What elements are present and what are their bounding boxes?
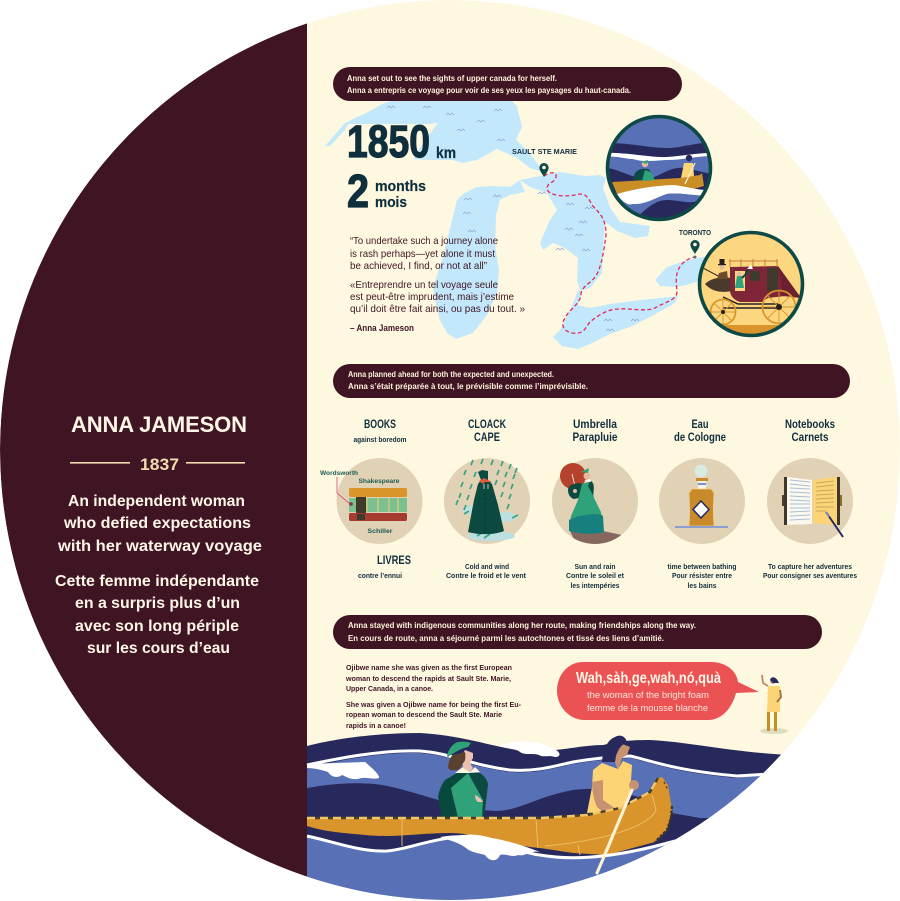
- item: notebooks: Pour consigner ses aventures: [763, 571, 857, 580]
- French description: en a surpris plus d’un: [75, 595, 240, 612]
- medallion: stagecoach: [695, 231, 810, 339]
- English description: [57, 493, 262, 555]
- canoe: [307, 777, 672, 855]
- speech bubble: Wah,sàh,ge,wah,nó,quà: [576, 670, 721, 687]
- stat: 2 months: months: [375, 178, 426, 195]
- quote: be achieved, I find, or not at all”: [350, 260, 487, 272]
- label: Sault Ste Marie with pin: SAULT STE MARIE: [512, 147, 577, 156]
- text block: Ojibwe name: Ojibwe name she was given as the first European: [346, 663, 512, 672]
- band 3: Anna stayed with indigenous communities along her route, making friendships along the way.: [348, 621, 696, 630]
- quote: “To undertake such a journey alone: [350, 235, 498, 247]
- stat: 2 months: mois: [375, 194, 407, 211]
- item: umbrella: Parapluie: [572, 432, 618, 444]
- quote: – Anna Jameson: [350, 323, 414, 334]
- quote: qu’il doit être fait ainsi, ou pas du tout. »: [350, 303, 525, 315]
- item: books: against boredom: [354, 435, 406, 444]
- text block: Ojibwe name: Upper Canada, in a canoe.: [346, 684, 433, 693]
- item: umbrella: [552, 419, 638, 590]
- back foam: [500, 742, 560, 757]
- icon: open notebook: [767, 458, 853, 544]
- band 2: Anna planned ahead for both the expected and unexpected.: [348, 370, 554, 379]
- item: cloak: Contre le froid et le vent: [446, 571, 527, 580]
- item: cloak: Cold and wind: [465, 562, 509, 571]
- stat: 1850 km: 1850: [347, 116, 430, 167]
- quote: [350, 235, 525, 334]
- item: cloak: CLOACK: [468, 419, 507, 431]
- medallion: canoe in rapids: [606, 114, 712, 222]
- band 1: Anna a entrepris ce voyage pour voir de ses yeux les paysages du haut-canada.: [347, 86, 631, 95]
- speech bubble: the woman of the bright foam: [587, 690, 709, 700]
- lower white wave with foam: [307, 836, 675, 858]
- English description: who defied expectations: [63, 515, 251, 532]
- item: books: LIVRES: [377, 555, 411, 567]
- item: eau de cologne: Eau: [692, 419, 708, 431]
- stat: 2 months: 2: [347, 165, 369, 217]
- band 1: Anna set out to see the sights of upper canada for herself.: [347, 74, 557, 83]
- item: notebooks: Notebooks: [785, 419, 835, 431]
- item: umbrella: les intempéries: [570, 581, 620, 590]
- map: Great Lakes: [325, 99, 708, 349]
- speech bubble: [557, 662, 759, 720]
- background cream panel: [307, 0, 900, 754]
- icon: books: Shakespeare: [358, 478, 400, 485]
- item: eau de cologne: time between bathing: [668, 562, 736, 571]
- band 3: [333, 615, 822, 649]
- item: eau de cologne: [659, 419, 745, 590]
- item: cloak: CAPE: [474, 432, 500, 444]
- quote: est peut-être imprudent, mais j’estime: [350, 291, 514, 303]
- item: umbrella: Umbrella: [573, 419, 618, 431]
- navy back wave: [307, 733, 790, 901]
- item: umbrella: Sun and rain: [574, 562, 616, 571]
- item: cloak: [444, 419, 530, 580]
- band 1: [333, 67, 682, 101]
- band 3: En cours de route, anna a séjourné parmi les autochtones et tissé des liens d’amitié.: [348, 634, 664, 643]
- speech bubble: femme de la mousse blanche: [587, 703, 708, 713]
- label: Toronto with pin: [679, 228, 711, 258]
- lake wave marks: [387, 106, 639, 331]
- band 2: [333, 364, 850, 398]
- icon: books: Wordsworth: [320, 470, 358, 477]
- icon: books: Schiller: [368, 528, 393, 535]
- panel: title sidebar: [0, 0, 307, 901]
- label: Toronto with pin: TORONTO: [679, 228, 711, 237]
- text block: Ojibwe name: rapids in a canoe!: [346, 721, 406, 730]
- stat: 1850 km: [348, 124, 456, 158]
- year 1837 with rules: 1837: [140, 455, 179, 474]
- English description: with her waterway voyage: [57, 538, 262, 555]
- band 2: Anna s’était préparée à tout, le prévisible comme l’imprévisible.: [348, 382, 588, 391]
- text block: Ojibwe name: woman to descend the rapids at Sault Ste. Marie,: [345, 674, 511, 683]
- icon: cloak in rain: [444, 458, 530, 544]
- quote: «Entreprendre un tel voyage seule: [350, 279, 498, 291]
- scene: canoe on waves: [307, 733, 790, 901]
- item: books: [320, 419, 422, 580]
- stat: 1850 km: km: [436, 145, 456, 162]
- item: notebooks: Carnets: [792, 432, 828, 444]
- item: eau de cologne: Pour résister entre: [672, 571, 732, 580]
- heading: Anna Jameson: ANNA JAMESON: [71, 412, 247, 437]
- French description: sur les cours d’eau: [87, 640, 230, 657]
- quote: is rash perhaps—yet alone it must: [350, 248, 495, 260]
- figure: paddler: [587, 736, 639, 822]
- stat: 2 months: [348, 174, 426, 208]
- lower water: [307, 836, 675, 901]
- white wave line: [307, 751, 770, 776]
- dark hills: [307, 783, 730, 860]
- icon: woman with parasol: [552, 458, 638, 550]
- figure: Anna Jameson: [438, 742, 488, 824]
- French description: avec son long périple: [75, 618, 239, 635]
- front foam: [307, 762, 379, 779]
- French description: [55, 573, 259, 657]
- item: notebooks: [763, 419, 857, 580]
- item: notebooks: To capture her adventures: [768, 562, 852, 571]
- label: Sault Ste Marie with pin: [512, 147, 577, 177]
- item: books: BOOKS: [364, 419, 396, 431]
- item: umbrella: Contre le soleil et: [566, 571, 625, 580]
- text block: Ojibwe name: ropean woman to descend the Sault Ste. Marie: [346, 710, 502, 719]
- paddle blade over water: [597, 838, 612, 873]
- item: books: contre l’ennui: [358, 571, 402, 580]
- text block: Ojibwe name: [345, 663, 521, 730]
- icon: cologne bottle: [659, 458, 745, 544]
- item: eau de cologne: les bains: [688, 581, 716, 590]
- English description: An independent woman: [68, 493, 245, 510]
- icon: books: [320, 458, 422, 544]
- paddle: [597, 790, 632, 873]
- French description: Cette femme indépendante: [55, 573, 259, 590]
- item: eau de cologne: de Cologne: [674, 432, 726, 444]
- blue water: [307, 753, 780, 901]
- text block: Ojibwe name: She was given a Ojibwe name for being the first Eu-: [346, 700, 521, 709]
- route: dashed voyage line: [544, 173, 695, 333]
- figure: Ojibwe woman waving: [760, 675, 788, 734]
